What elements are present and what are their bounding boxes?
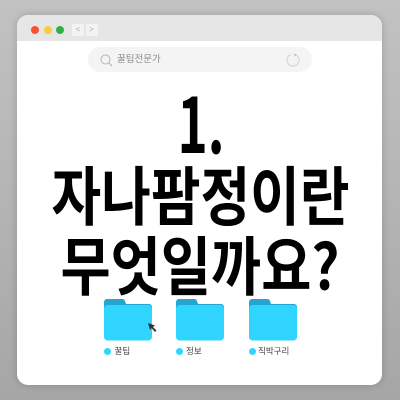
label: 정보 <box>176 346 202 356</box>
title bar <box>17 15 382 41</box>
title line 3: 무엇일까요? <box>60 217 340 309</box>
search bar <box>88 47 312 72</box>
icon: reload <box>286 54 300 67</box>
icon: red dot <box>31 26 39 34</box>
icon: folder <box>176 299 224 340</box>
icon: folder <box>104 299 152 340</box>
legend dot <box>176 348 183 355</box>
title line 2: 자나팜정이란 <box>52 147 350 239</box>
label: 직박구리 <box>249 346 289 356</box>
icon: forward button <box>86 24 98 36</box>
icon: folder <box>249 299 297 340</box>
label text: 직박구리 <box>258 346 289 356</box>
search text: 꿀팁전문가 <box>117 54 161 65</box>
icon: forward button: > <box>89 24 94 34</box>
label text: 꿀팁 <box>114 346 130 356</box>
icon: back button <box>72 24 84 36</box>
icon: green dot <box>56 26 64 34</box>
folder: 정보 <box>176 299 224 340</box>
label: 꿀팁 <box>104 346 130 356</box>
window controls <box>31 24 98 36</box>
label text: 정보 <box>186 346 202 356</box>
title line 1: 1. <box>178 65 224 175</box>
icon: mouse cursor <box>148 323 156 332</box>
icon: back button: < <box>76 24 80 34</box>
icon: yellow dot <box>44 26 52 34</box>
icon: magnifier <box>100 54 112 66</box>
legend dot <box>248 348 256 355</box>
legend dot <box>104 348 111 355</box>
folder: 직박구리 <box>249 299 297 340</box>
folder: 꿀팁 <box>104 299 152 340</box>
